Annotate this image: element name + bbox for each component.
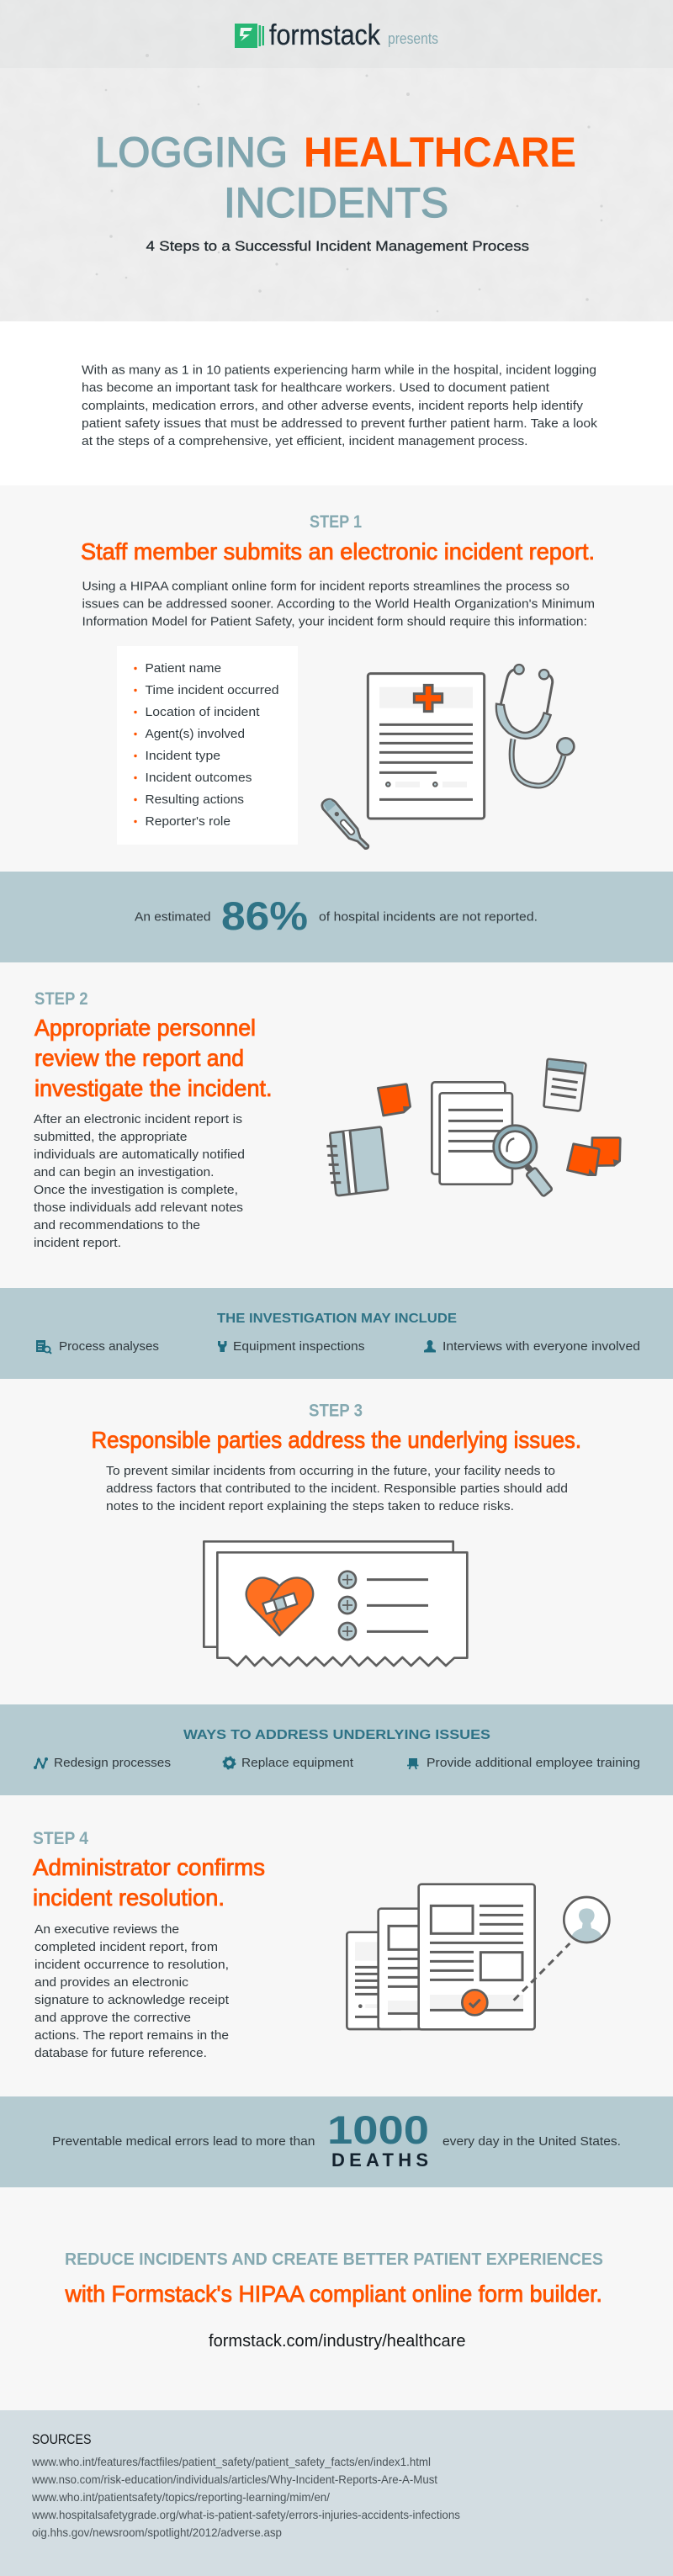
icon: thermometer (322, 799, 368, 849)
icon: plus bullets (339, 1572, 428, 1640)
icon: back ticket (204, 1541, 453, 1647)
item: redesign processes: Redesign processes (54, 1756, 171, 1770)
panel: hero header (0, 0, 673, 321)
stat band: 86%: 86% (221, 894, 308, 939)
title: LOGGING (95, 129, 288, 176)
step 2 text: After an electronic incident report is (34, 1112, 242, 1126)
step 4 text: actions. The report remains in the (34, 2028, 229, 2043)
illustration: report form, stethoscope, thermometer (322, 665, 574, 849)
step 1 text: Using a HIPAA compliant online form for incident reports streamlines the process so (82, 579, 570, 594)
checklist card: Time incident occurred (145, 683, 279, 697)
panel: intro: complaints, medication errors, and other adverse events, incident reports help identify (82, 399, 584, 413)
panel: call to action: REDUCE INCIDENTS AND CREATE BETTER PATIENT EXPERIENCES (65, 2250, 603, 2269)
step 2 heading: review the report and (34, 1045, 244, 1071)
panel: sources: www.hospitalsafetygrade.org/what-is-patient-safety/errors-injuries-accidents-infections (31, 2508, 460, 2521)
panel: ways to address band (0, 1704, 673, 1795)
panel: step 3 (91, 1402, 581, 1666)
logo: formstack presents: formstack (269, 19, 381, 51)
arrow: dashed connector (514, 1943, 570, 2001)
step 3 text: To prevent similar incidents from occurring in the future, your facility needs to (106, 1464, 555, 1478)
step 2 text: individuals are automatically notified (34, 1148, 245, 1162)
item: interviews: Interviews with everyone involved (442, 1339, 640, 1354)
step 4 text: incident occurrence to resolution, (34, 1958, 229, 1972)
step 2 text: and recommendations to the (34, 1218, 200, 1232)
title (95, 129, 576, 226)
icon: stethoscope (496, 665, 574, 786)
panel: sources: www.who.int/patientsafety/topics/reporting-learning/mim/en/ (31, 2490, 330, 2504)
item: replace equipment: Replace equipment (241, 1756, 354, 1770)
step 2 heading: Appropriate personnel (34, 1015, 256, 1041)
step 3 text: address factors that contributed to the incident. Responsible parties should add (106, 1481, 568, 1496)
step 3 heading: Responsible parties address the underlying issues. (91, 1427, 581, 1453)
icon: front document (419, 1884, 535, 2029)
icon: rear document (347, 1932, 403, 2029)
step 4 label: STEP 4 (33, 1829, 88, 1848)
icon: sticky notes pair (567, 1137, 620, 1175)
step 2 text: Once the investigation is complete, (34, 1183, 238, 1197)
icon: formstack mark (235, 24, 264, 48)
illustration: repair tickets with bandaged heart (204, 1541, 467, 1666)
checklist card: Incident type (145, 749, 220, 763)
item: equipment inspections: Equipment inspections (233, 1339, 365, 1354)
panel: investigation band (0, 1288, 673, 1379)
step 2 text (34, 1112, 245, 1250)
icon: approver avatar (564, 1897, 609, 1943)
stat band: 1000 deaths: Preventable medical errors lead to more than (52, 2134, 315, 2149)
panel: sources: www.nso.com/risk-education/individuals/articles/Why-Incident-Reports-Are-A-Must (31, 2473, 437, 2486)
icon: front ticket (217, 1552, 467, 1666)
panel: sources: SOURCES (32, 2431, 91, 2447)
step 3 label: STEP 3 (309, 1402, 363, 1420)
step 1 text (82, 579, 595, 629)
icon: approval check (462, 1990, 487, 2015)
step 2 text: incident report. (34, 1236, 121, 1250)
panel: step 2 (34, 989, 620, 1250)
item: employee training: Provide additional employee training (427, 1756, 640, 1770)
step 3 text: notes to the incident report explaining the steps taken to reduce risks. (106, 1499, 514, 1513)
step 1 label: STEP 1 (310, 512, 362, 532)
illustration: documents under review (326, 1059, 620, 1196)
icon: sticky note (378, 1084, 411, 1116)
checklist card (117, 646, 298, 845)
panel: sources (0, 2410, 673, 2576)
panel: step 4 (33, 1829, 609, 2060)
panel: intro: at the steps of a comprehensive, yet efficient, incident management process. (82, 434, 528, 448)
panel: intro: patient safety issues that must be addressed to prevent further patient harm. Take a look (82, 416, 598, 431)
title: INCIDENTS (224, 179, 448, 226)
panel: intro: With as many as 1 in 10 patients experiencing harm while in the hospital, incident logging (82, 363, 596, 377)
step 4 text: and provides an electronic (34, 1975, 189, 1990)
icon: notebook (326, 1127, 388, 1195)
step 1 text: issues can be addressed sooner. According to the World Health Organization's Minimum (82, 597, 595, 611)
checklist card: Reporter's role (145, 814, 231, 829)
title: HEALTHCARE (304, 129, 576, 176)
step 3 text (106, 1464, 568, 1513)
icon: magnifying glass (494, 1126, 553, 1196)
step 2 heading: investigate the incident. (34, 1075, 273, 1101)
subtitle: 4 Steps to a Successful Incident Management Process (146, 238, 529, 254)
step 4 text: An executive reviews the (34, 1922, 179, 1937)
icon: report form (368, 674, 485, 819)
logo: formstack presents (235, 19, 438, 51)
checklist card: Incident outcomes (145, 771, 252, 785)
icon: bandaged heart (246, 1577, 313, 1635)
band heading: THE INVESTIGATION MAY INCLUDE (217, 1312, 457, 1326)
panel: step 1 (81, 512, 595, 849)
step 1 text: Information Model for Patient Safety, your incident form should require this information: (82, 614, 587, 629)
stat band: 1000 deaths: 1000 (327, 2108, 429, 2153)
step 4 text: database for future reference. (34, 2046, 207, 2060)
panel: intro (0, 321, 673, 485)
icon: middle document (379, 1909, 448, 2029)
step 2 text: submitted, the appropriate (34, 1130, 187, 1144)
icon: paper stack (432, 1082, 512, 1185)
panel: call to action: formstack.com/industry/healthcare (209, 2332, 466, 2351)
checklist card: Resulting actions (145, 792, 244, 807)
step 4 heading: Administrator confirms (33, 1854, 265, 1880)
stat band: 1000 deaths: every day in the United States. (442, 2134, 621, 2149)
stat band: 1000 deaths: DEATHS (331, 2149, 428, 2171)
logo: formstack presents: presents (388, 30, 438, 47)
step 1 heading: Staff member submits an electronic incident report. (81, 538, 595, 564)
stat band: 1000 deaths (0, 2096, 673, 2187)
step 2 heading (34, 1015, 273, 1101)
panel: call to action (65, 2250, 603, 2351)
illustration: signed documents and approver (347, 1884, 609, 2029)
step 2 label: STEP 2 (34, 989, 87, 1009)
step 4 text: completed incident report, from (34, 1940, 218, 1954)
panel: sources: www.who.int/features/factfiles/patient_safety/patient_safety_facts/en/index1.html (31, 2455, 431, 2468)
band heading: WAYS TO ADDRESS UNDERLYING ISSUES (183, 1728, 490, 1742)
panel: call to action: with Formstack's HIPAA compliant online form builder. (65, 2281, 602, 2307)
panel: intro: has become an important task for healthcare workers. Used to document patient (82, 380, 550, 395)
step 4 text (34, 1922, 230, 2060)
step 4 heading: incident resolution. (33, 1884, 225, 1911)
icon: notepad (544, 1059, 586, 1110)
step 4 heading (33, 1854, 265, 1911)
step 4 text: signature to acknowledge receipt (34, 1993, 230, 2007)
step 2 text: those individuals add relevant notes (34, 1201, 243, 1215)
checklist card: Location of incident (145, 705, 260, 719)
item: process analyses: Process analyses (59, 1339, 159, 1354)
stat band: 86% (0, 872, 673, 962)
checklist card: Patient name (145, 661, 221, 676)
stat band: 86%: of hospital incidents are not reported. (319, 910, 538, 924)
step 4 text: and approve the corrective (34, 2011, 191, 2025)
checklist card: Agent(s) involved (145, 727, 245, 741)
step 2 text: and can begin an investigation. (34, 1165, 215, 1179)
stat band: 86%: An estimated (135, 910, 210, 924)
panel: sources: oig.hhs.gov/newsroom/spotlight/2012/adverse.asp (32, 2526, 282, 2539)
